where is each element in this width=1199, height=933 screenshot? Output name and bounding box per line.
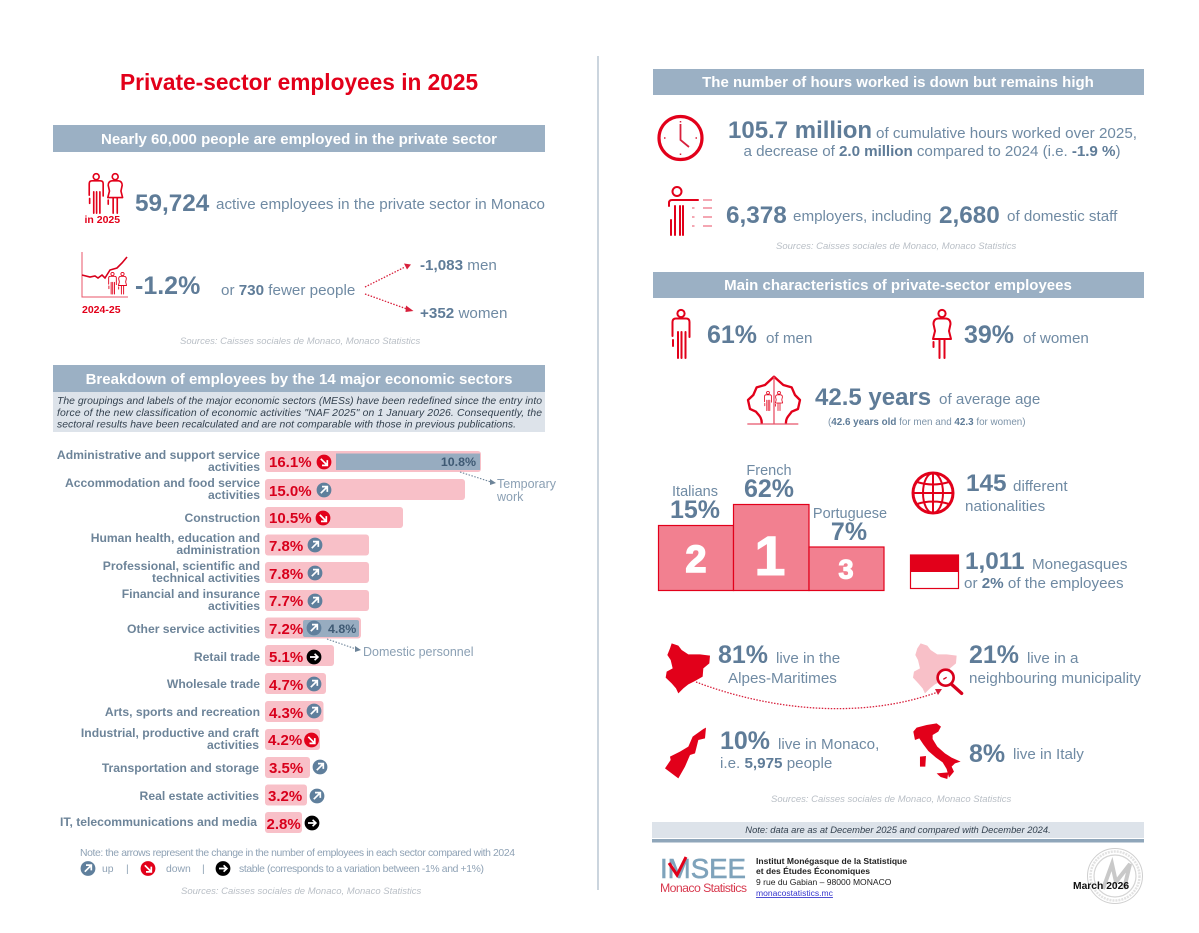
heading: characteristics — [653, 272, 1144, 298]
row: other services: 7.2% — [269, 621, 303, 638]
row: human health: 7.8% — [269, 538, 303, 555]
row: construction — [184, 507, 403, 528]
stat: average age — [815, 384, 1040, 428]
stat: Monegasques: 1,011 — [965, 548, 1024, 575]
heading: hours: The number of hours worked is down but remains high — [702, 74, 1094, 91]
icon: woman — [933, 310, 951, 358]
stat: nationalities: different — [1013, 478, 1068, 495]
seal: Monaco Statistics — [1088, 848, 1142, 904]
date: March 2026 — [1073, 881, 1129, 892]
row: accommodation: activities — [208, 488, 260, 502]
source: Sources: Caisses sociales de Monaco, Monaco Statistics — [776, 241, 1016, 252]
row: transportation: 3.5% — [269, 760, 303, 777]
row: human health — [91, 531, 369, 557]
stat: Italy — [969, 740, 1084, 768]
stat: hours: of cumulative hours worked over 2025, — [876, 125, 1137, 142]
step: Italians: 15% — [670, 496, 720, 524]
icon: two employees in 2025: in 2025 — [84, 214, 120, 226]
row: financial: 7.7% — [269, 593, 303, 610]
panel: private sector headcount — [53, 125, 545, 347]
row: accommodation — [65, 476, 465, 502]
icon: two employees in 2025 — [84, 174, 123, 226]
legend: arrows: down — [166, 864, 191, 875]
step: French: 62% — [744, 475, 794, 503]
step: French — [734, 463, 809, 590]
heading: nearly 60,000: Nearly 60,000 people are employed in the private sector — [101, 131, 497, 148]
row: industrial — [81, 726, 320, 752]
row: accommodation: 15.0% — [269, 483, 312, 500]
note: data date: Note: data are as at December 2025 and compared with December 2024. — [745, 824, 1051, 835]
icon: employer — [669, 187, 712, 235]
title: Private-sector employees in 2025 — [120, 69, 478, 95]
note: arrows: Note: the arrows represent the change in the number of employees in each sector compared with 2024 — [80, 848, 515, 859]
stat: men: of men — [766, 330, 812, 347]
stat: 59,724 active employees: 59,724 — [135, 190, 210, 217]
row: administrative: Administrative and support service — [57, 448, 260, 462]
callout: temporary work: work — [496, 490, 524, 504]
heading: hours — [653, 69, 1144, 95]
logo: IMSEE Monaco Statistics: IMSEE — [660, 853, 746, 884]
row: transportation: Transportation and storage — [102, 761, 259, 775]
stat: employers: 2,680 — [939, 202, 1000, 229]
icon: globe — [913, 473, 953, 513]
stat: neighbouring municipality: neighbouring municipality — [969, 670, 1141, 687]
stat: Monegasques: or 2% of the employees — [964, 575, 1124, 592]
stat: employers — [726, 202, 1118, 229]
source: Sources: Caisses sociales de Monaco, Monaco Statistics — [771, 794, 1011, 805]
arrow: map link — [696, 682, 942, 709]
icon: trend chart 2024-25 — [82, 252, 128, 316]
stat: average age: (42.6 years old for men and 42.3 for women) — [828, 417, 1026, 428]
step: French: 1 — [754, 524, 786, 587]
stat: employers: employers, including — [793, 208, 931, 225]
row: real estate: Real estate activities — [140, 789, 259, 803]
icon: man — [672, 310, 690, 358]
stat: average age: of average age — [939, 391, 1040, 408]
row: retail: 5.1% — [269, 649, 303, 666]
stat: neighbouring municipality: 21% — [969, 641, 1019, 669]
arrow: to women — [365, 294, 414, 312]
row: wholesale: Wholesale trade — [167, 677, 260, 691]
step: Portuguese: 3 — [838, 554, 854, 584]
stat: women — [964, 321, 1089, 349]
row: wholesale — [167, 673, 326, 694]
row: IT: IT, telecommunications and media — [60, 815, 257, 829]
row: financial: Financial and insurance — [122, 587, 260, 601]
footer: institute address: monacostatistics.mc — [756, 888, 834, 898]
icon: trend chart 2024-25: 2024-25 — [82, 304, 121, 316]
panel: breakdown by sector — [53, 365, 557, 897]
podium: nationalities — [658, 463, 887, 590]
stat: men — [707, 321, 812, 349]
row: retail: Retail trade — [194, 650, 260, 664]
footer: institute address: et des Études Économiques — [756, 865, 870, 876]
step: Portuguese: 7% — [831, 518, 867, 546]
stat: nationalities — [965, 470, 1068, 515]
stat: Monaco: live in Monaco, — [778, 736, 879, 753]
stat: Italy: live in Italy — [1013, 746, 1084, 763]
row: administrative: activities — [208, 460, 260, 474]
step: French: French — [746, 463, 792, 479]
stat: Monegasques: Monegasques — [1032, 556, 1128, 573]
heading: nearly 60,000 — [53, 125, 545, 152]
stat: Monegasques — [964, 548, 1128, 592]
row: wholesale: 4.7% — [269, 677, 303, 694]
text: women change: +352 women — [420, 305, 507, 322]
stat: Alpes-Maritimes: 81% — [718, 641, 768, 669]
note box: force of the new classification of economic activities "NAF 2025" on 1 January 2026. Consequently, the — [57, 408, 542, 419]
divider — [597, 56, 599, 890]
row: other services — [127, 618, 361, 638]
callout: domestic personnel: Domestic personnel — [363, 645, 473, 659]
text: men change: -1,083 men — [420, 257, 497, 274]
row: other services: 4.8% — [328, 622, 356, 636]
stat: average age: 42.5 years — [815, 384, 931, 411]
row: administrative — [57, 448, 481, 474]
arrow: to men — [365, 264, 411, 287]
row: industrial: activities — [207, 738, 259, 752]
stat: -1.2%: -1.2% — [135, 272, 200, 300]
row: professional: technical activities — [152, 571, 260, 585]
callout: temporary work — [460, 472, 557, 504]
step: Italians — [658, 484, 734, 590]
callout: domestic personnel — [327, 639, 473, 659]
row: retail — [194, 645, 334, 666]
row: IT — [60, 812, 319, 833]
stat: hours: 105.7 million — [728, 117, 872, 144]
legend: arrows: stable (corresponds to a variation between -1% and +1%) — [239, 864, 484, 875]
note: data date — [652, 822, 1144, 842]
row: human health: administration — [176, 543, 260, 557]
stat: nationalities: nationalities — [965, 498, 1046, 515]
row: administrative: 16.1% — [269, 454, 312, 471]
row: financial — [122, 587, 369, 613]
stat: neighbouring municipality: live in a — [1027, 650, 1079, 667]
stat: neighbouring municipality — [969, 641, 1141, 687]
stat: employers: of domestic staff — [1007, 208, 1118, 225]
step: Italians: 2 — [685, 539, 707, 581]
row: professional: 7.8% — [269, 566, 303, 583]
row: industrial: Industrial, productive and craft — [81, 726, 259, 740]
row: human health: Human health, education and — [91, 531, 260, 545]
row: professional: Professional, scientific and — [103, 559, 260, 573]
row: IT: 2.8% — [266, 816, 301, 833]
note box: The groupings and labels of the major economic sectors (MESs) have been redefined since the entry into — [57, 396, 542, 407]
text: 730 fewer people: or 730 fewer people — [221, 282, 355, 299]
stat: Alpes-Maritimes — [718, 641, 840, 687]
row: construction: Construction — [184, 511, 260, 525]
callout: temporary work: Temporary — [497, 477, 557, 491]
panel: main characteristics — [653, 272, 1144, 805]
source: Sources: Caisses sociales de Monaco, Monaco Statistics — [180, 336, 420, 347]
stat: 59,724 active employees — [135, 190, 545, 217]
stat: Alpes-Maritimes: live in the — [776, 650, 840, 667]
stat: nationalities: 145 — [966, 470, 1007, 497]
stat: Monaco: i.e. 5,975 people — [720, 755, 832, 772]
bar chart: sectors — [57, 448, 481, 833]
step: Portuguese: Portuguese — [813, 506, 887, 522]
stat: hours — [728, 117, 1137, 160]
stat: Monaco: 10% — [720, 727, 770, 755]
icon: age pyramid — [747, 377, 800, 424]
row: arts: Arts, sports and recreation — [105, 705, 260, 719]
stat: women: of women — [1023, 330, 1089, 347]
footer: institute address — [756, 856, 907, 898]
stat: women: 39% — [964, 321, 1014, 349]
step: Portuguese — [809, 506, 887, 590]
icon: neighbouring municipality map — [913, 643, 962, 693]
logo: IMSEE Monaco Statistics: Monaco Statistics — [660, 881, 747, 895]
icon: Monaco flag — [910, 555, 958, 588]
step: Italians: Italians — [672, 484, 718, 500]
stat: Alpes-Maritimes: Alpes-Maritimes — [728, 670, 837, 687]
stat: employers: 6,378 — [726, 202, 787, 229]
footer: institute address: 9 rue du Gabian – 98000 MONACO — [756, 877, 892, 887]
row: transportation — [102, 757, 327, 778]
legend: arrows: | — [202, 864, 205, 875]
stat: Monaco — [720, 727, 879, 772]
icon: Monaco map — [665, 728, 706, 778]
source: Sources: Caisses sociales de Monaco, Monaco Statistics — [181, 886, 421, 897]
icon: Alpes-Maritimes map — [666, 643, 710, 693]
stat: men: 61% — [707, 321, 757, 349]
legend: arrows: up — [102, 864, 114, 875]
icon: clock — [659, 116, 702, 160]
row: industrial: 4.2% — [268, 732, 302, 749]
row: other services: Other service activities — [127, 622, 260, 636]
stat: hours: a decrease of 2.0 million compared to 2024 (i.e. -1.9 %) — [744, 143, 1120, 160]
row: real estate — [140, 784, 324, 806]
stat: 59,724 active employees: active employees in the private sector in Monaco — [216, 196, 545, 213]
note box — [53, 392, 545, 432]
row: accommodation: Accommodation and food service — [65, 476, 260, 490]
row: arts — [105, 701, 324, 722]
stat: Italy: 8% — [969, 740, 1005, 768]
row: real estate: 3.2% — [268, 788, 302, 805]
row: administrative: 10.8% — [441, 455, 476, 469]
legend: arrows: | — [126, 864, 129, 875]
note box: sectoral results have been recalculated and are not comparable with those in previous publications. — [57, 420, 516, 430]
row: financial: activities — [208, 599, 260, 613]
footer: institute address: Institut Monégasque de la Statistique — [756, 856, 907, 866]
row: construction: 10.5% — [269, 510, 312, 527]
panel: hours worked — [653, 69, 1144, 252]
legend: arrows — [81, 861, 484, 876]
heading: characteristics: Main characteristics of private-sector employees — [724, 277, 1072, 294]
icon: Italy map — [913, 723, 961, 779]
row: professional — [103, 559, 369, 585]
row: arts: 4.3% — [269, 705, 303, 722]
heading: breakdown: Breakdown of employees by the 14 major economic sectors — [86, 371, 512, 388]
heading: breakdown — [53, 365, 545, 392]
